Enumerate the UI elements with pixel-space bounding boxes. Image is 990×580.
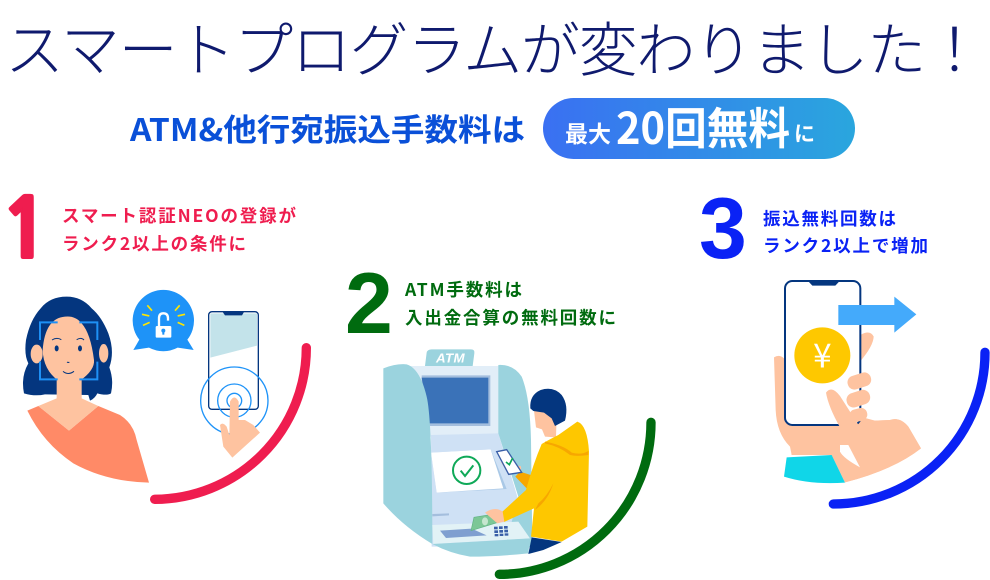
illustration: step 1 face authentication [23,290,306,499]
icon: yen coin: ¥ [813,328,832,377]
pill: up to 20 free [543,93,855,159]
pill: up to 20 free: 20回無料 [616,93,790,157]
step 1 caption: ランク2以上の条件に [62,231,246,256]
step 2 caption [404,277,616,330]
ATM machine: ATM [435,351,466,366]
step 2 caption: 入出金合算の無料回数に [405,305,616,330]
title: スマートプログラムが変わりました！ [5,3,984,88]
step 3 caption: 振込無料回数は [763,206,896,231]
step 1 number: 1 [1,189,50,270]
icon: yen coin [794,327,850,383]
arrow: transfer [838,297,916,333]
step 3 number: 3 [699,181,747,277]
arc: step 1 [155,348,306,499]
step 3 caption [763,206,928,258]
illustration: step 3 transfer on phone [774,281,985,504]
ATM machine [383,349,532,557]
woman with face frame [23,297,149,483]
arc: step 2 [499,422,651,574]
icon: smartphone with tap [201,312,268,458]
step 2 caption: ATM手数料は [404,277,522,302]
icon: unlock speech bubble [133,290,194,351]
illustration: step 2 ATM [383,349,651,574]
step 1 caption: スマート認証NEOの登録が [62,203,296,228]
step 1 caption [62,203,296,256]
step 3 caption: ランク2以上で増加 [763,233,928,258]
arc: step 3 [833,352,985,504]
person in yellow hoodie [471,389,589,554]
hand and phone [774,281,921,483]
pill: up to 20 free: 最大 [565,115,611,149]
pill: up to 20 free: に [794,118,815,148]
step 2 number: 2 [345,256,393,352]
subtitle: ATM&他行宛振込手数料は [129,105,525,150]
